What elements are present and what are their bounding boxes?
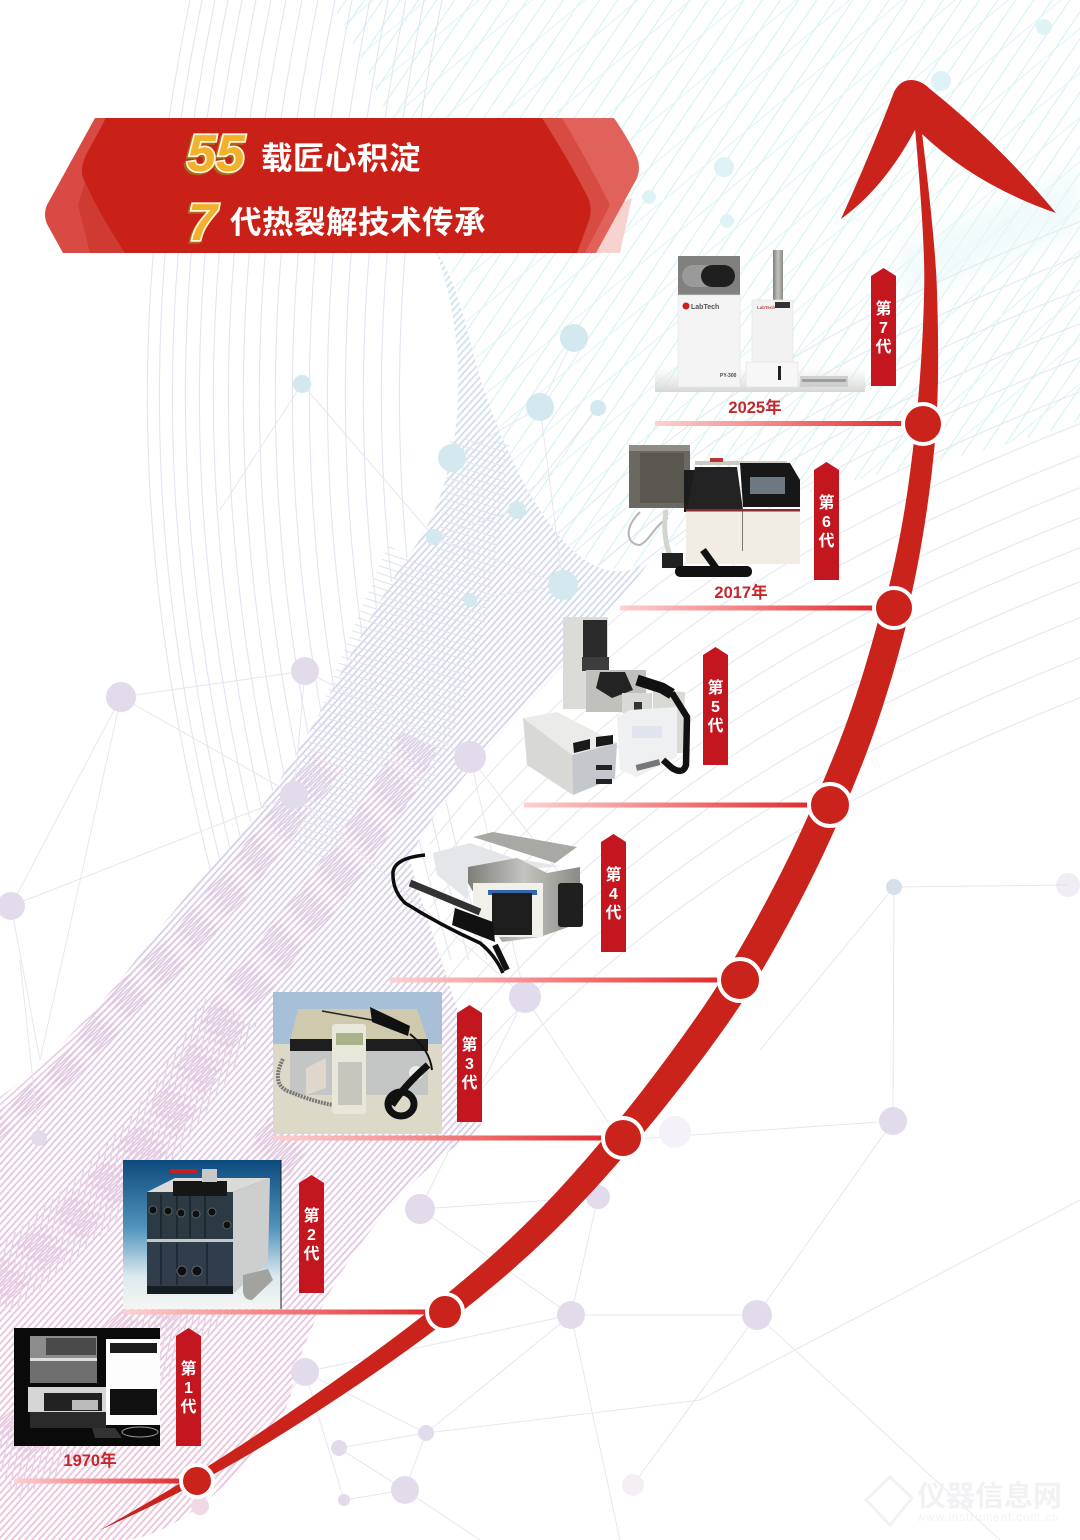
watermark url: www.instrument.com.cn <box>916 1512 1059 1524</box>
generation 5 <box>523 617 728 795</box>
generation tag 6 <box>814 462 839 580</box>
instrument photo: generation 7: LabTech <box>691 304 719 311</box>
generation tag 3 <box>457 1005 482 1122</box>
instrument photo: generation 7: PY-300 <box>720 373 737 379</box>
timeline nodes <box>181 404 943 1497</box>
instrument photo: generation 7 <box>655 250 865 392</box>
generation tag 5: 第 <box>707 678 724 697</box>
generation 3 <box>273 992 482 1134</box>
generation tag 6: 第 <box>818 493 835 512</box>
decorative mesh swoosh <box>0 250 650 1540</box>
instrument photo: generation 2 <box>123 1160 282 1309</box>
generation tag 1: 第 <box>180 1359 197 1378</box>
watermark text: 仪器信息网 <box>917 1480 1062 1513</box>
generation tag 6: 代 <box>818 533 835 550</box>
generation 6 <box>629 445 839 602</box>
generation tag 2: 代 <box>303 1246 320 1263</box>
watermark icon <box>866 1477 912 1525</box>
instrument photo: generation 7: LabTech <box>757 305 775 310</box>
generation tag 1 <box>176 1328 201 1446</box>
instrument photo: generation 3 <box>273 992 442 1134</box>
generation tag 3: 第 <box>461 1035 478 1054</box>
generation tag 3: 代 <box>461 1075 478 1092</box>
generation tag 2: 第 <box>303 1206 320 1225</box>
title banner <box>45 118 639 253</box>
generation tag 1: 1 <box>184 1380 193 1397</box>
generation tag 7 <box>871 268 896 386</box>
generation tag 5: 代 <box>707 718 724 735</box>
banner shape <box>45 118 639 253</box>
generation tag 3: 3 <box>465 1056 474 1073</box>
generation tag 7: 7 <box>879 320 888 337</box>
title line 2: 代热裂解技术传承 <box>230 204 486 240</box>
instrument photo: generation 5 <box>523 617 687 795</box>
generation tag 4: 第 <box>605 865 622 884</box>
timeline connector lines <box>14 421 905 1484</box>
generation tag 5: 5 <box>711 699 720 716</box>
generation tag 7: 代 <box>875 339 892 356</box>
generation tag 4: 4 <box>609 886 618 903</box>
generation tag 6: 6 <box>822 514 831 531</box>
generation 4 <box>393 832 626 973</box>
year label 2017: 2017年 <box>714 582 768 602</box>
title number 7: 7 <box>188 194 219 252</box>
title line 1: 载匠心积淀 <box>261 140 421 176</box>
generation 2 <box>123 1160 324 1309</box>
generation tag 1: 代 <box>180 1399 197 1416</box>
instrument photo: generation 6 <box>629 445 800 577</box>
title number 55: 55 <box>187 125 246 183</box>
year label 1970: 1970年 <box>63 1450 117 1470</box>
generation 1 <box>14 1328 201 1470</box>
instrument photo: generation 1 <box>14 1328 160 1446</box>
generation tag 4 <box>601 834 626 952</box>
year label 2025: 2025年 <box>728 397 782 417</box>
generation tag 5 <box>703 647 728 765</box>
generation tag 4: 代 <box>605 905 622 922</box>
generation tag 2 <box>299 1175 324 1293</box>
generation tag 7: 第 <box>875 299 892 318</box>
instrument photo: generation 4 <box>393 832 583 973</box>
watermark <box>866 1477 1062 1525</box>
generation 7 <box>655 250 896 417</box>
generation tag 2: 2 <box>307 1227 316 1244</box>
